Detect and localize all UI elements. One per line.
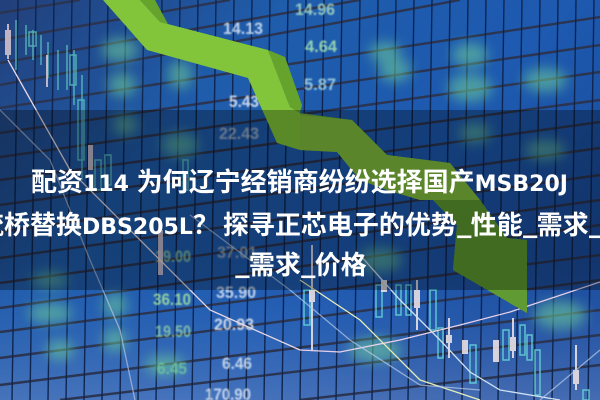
chart numbers: 20.93 [214, 315, 254, 334]
chart numbers: 19.50 [155, 322, 191, 341]
chart numbers: 5.43 [229, 92, 259, 111]
chart numbers: 36.10 [153, 290, 191, 309]
title line 1: 配资114 为何辽宁经销商纷纷选择国产MSB20J [31, 162, 568, 199]
chart numbers: 5.87 [304, 75, 336, 94]
title line 3: _需求_价格 [235, 245, 367, 282]
chart numbers: 35.90 [216, 283, 256, 302]
chart numbers: 6.46 [222, 354, 252, 373]
chart numbers [153, 0, 338, 400]
candlestick chart: left [16, 20, 188, 190]
chart numbers: 14.13 [223, 19, 263, 38]
dark title band [0, 110, 600, 290]
chart numbers: 19.00 [155, 247, 191, 266]
chart numbers: 4.64 [305, 37, 338, 56]
chart numbers: 22.43 [219, 124, 259, 143]
green glow blobs [28, 38, 586, 375]
chart numbers: 14.96 [295, 0, 335, 19]
chart numbers: 6.45 [157, 359, 187, 378]
falling green arrow [103, 0, 527, 313]
candlestick chart: right [304, 285, 589, 400]
chart numbers: 37.01 [217, 243, 257, 262]
